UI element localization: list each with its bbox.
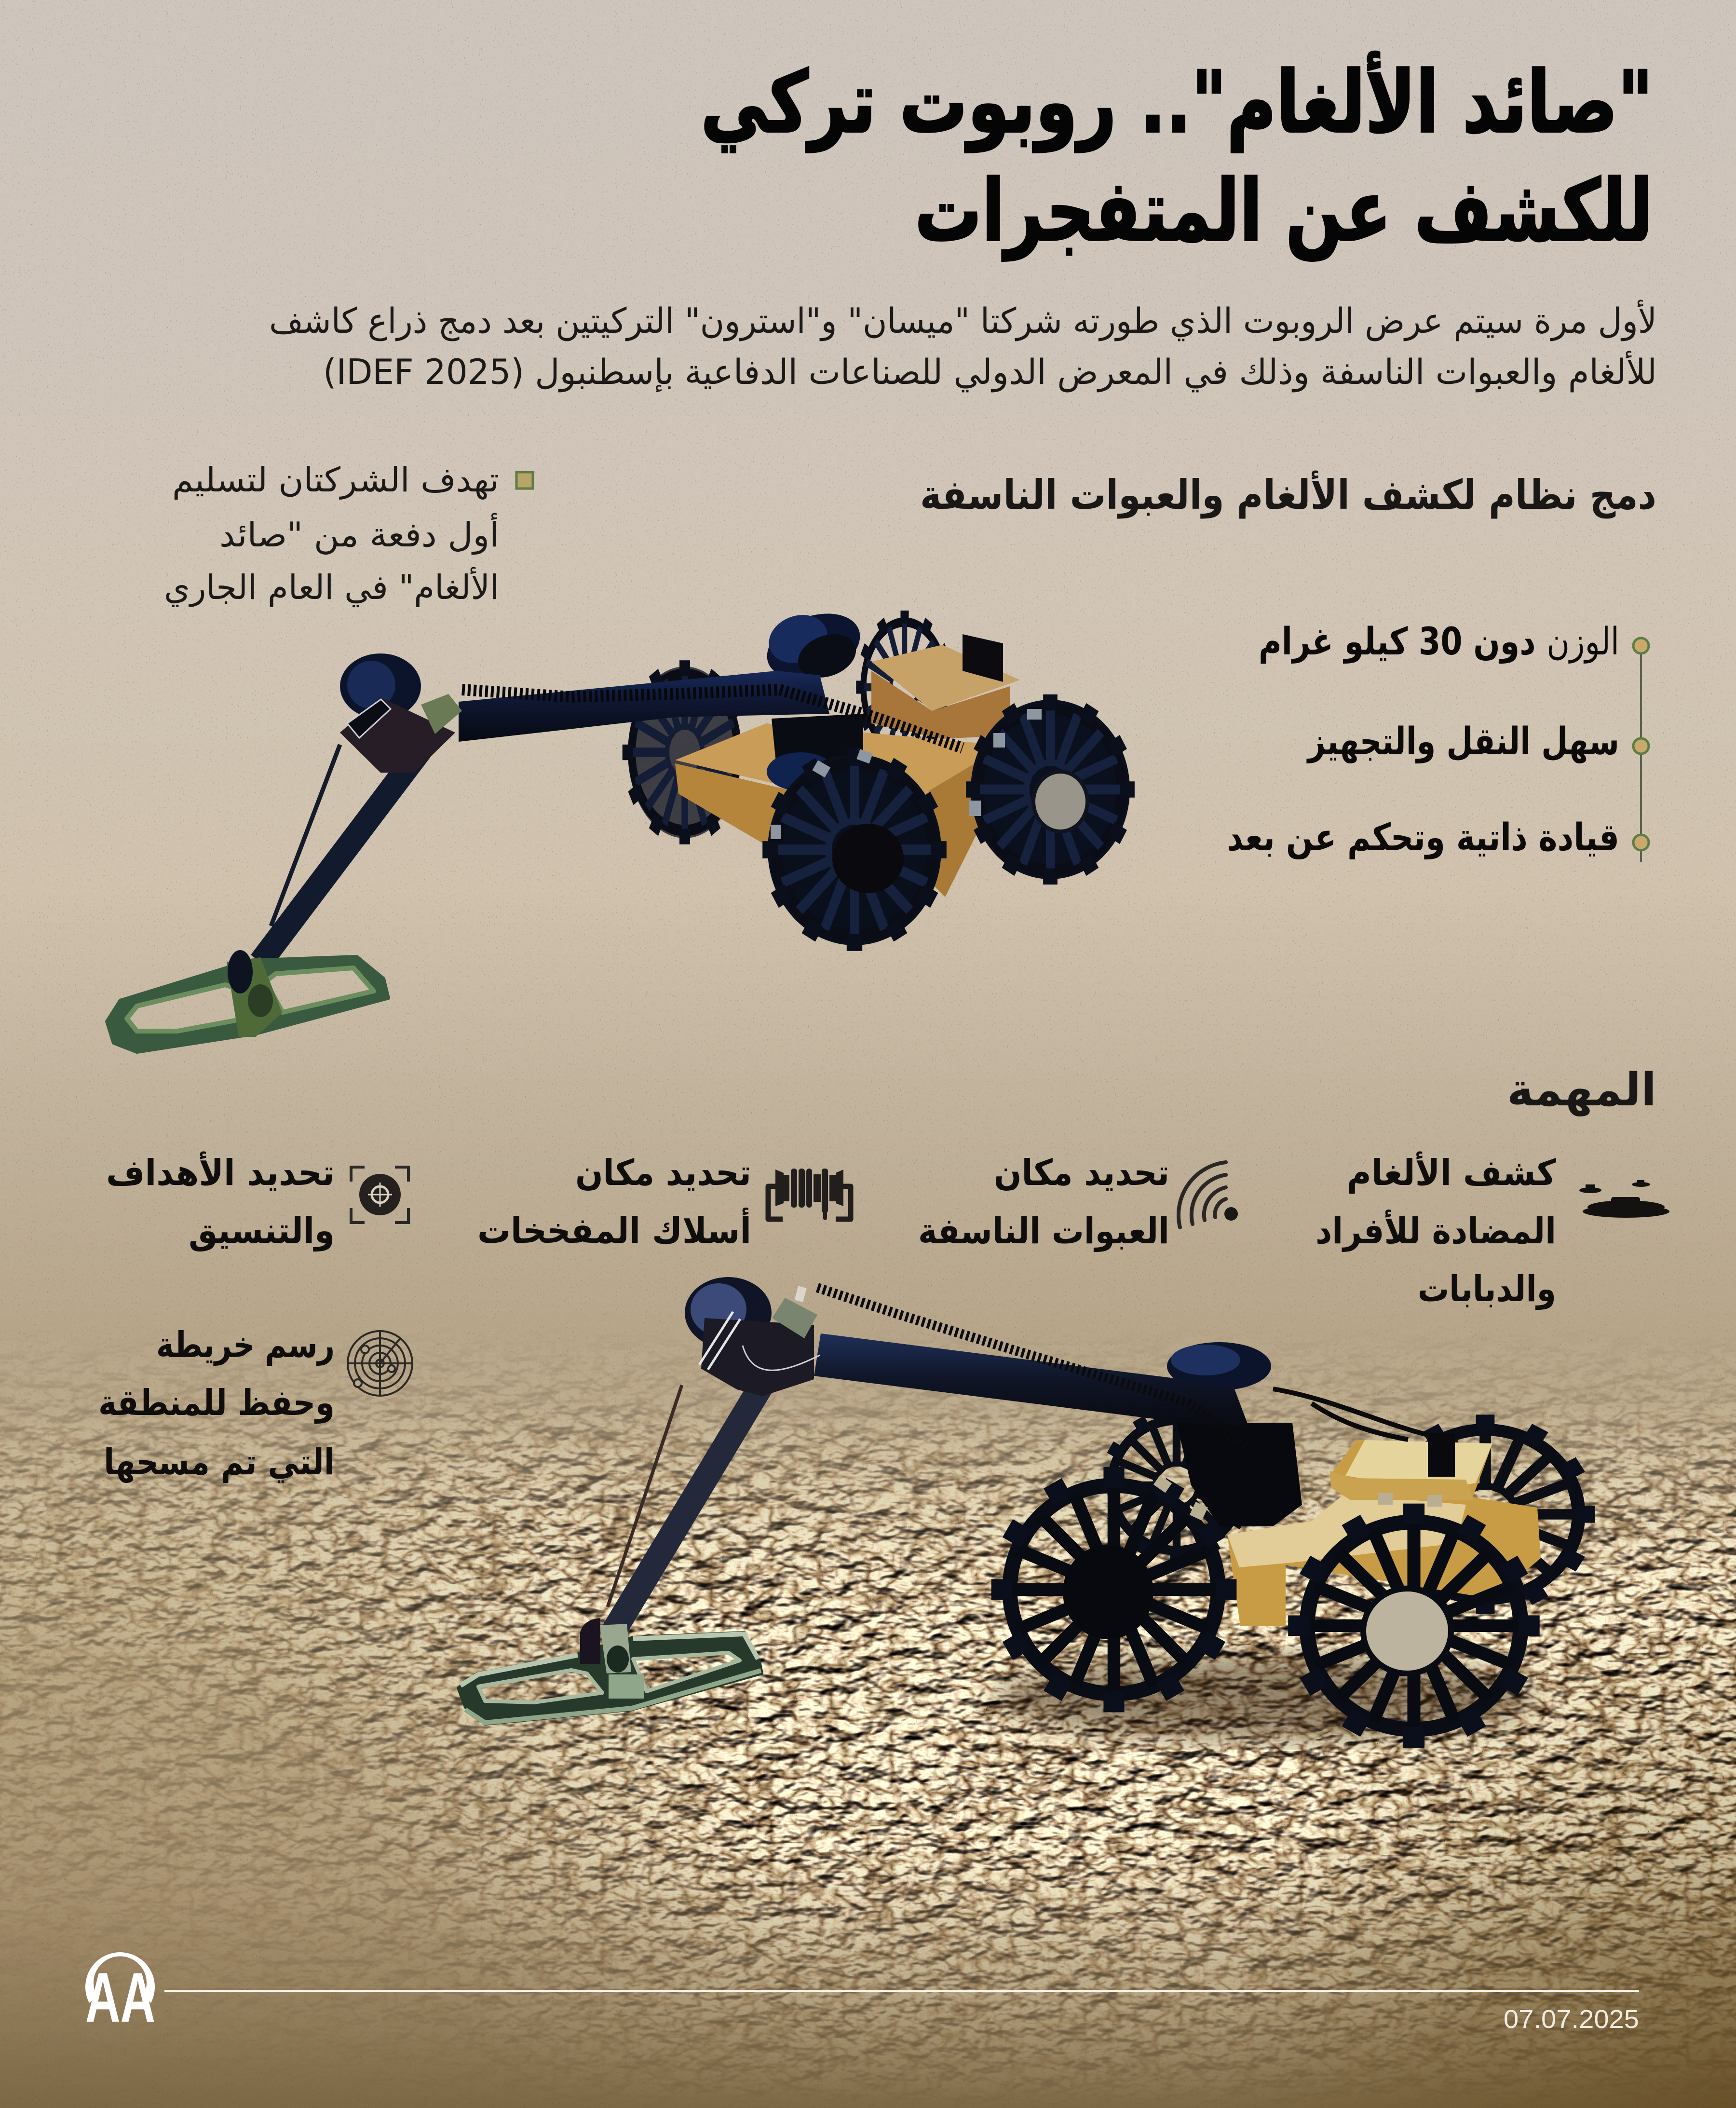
spring cable [817, 1288, 1247, 1447]
elbow motor [685, 1277, 772, 1348]
mission item: identify targets [106, 1151, 408, 1252]
mission item: mapping: وحفظ للمنطقة [98, 1382, 335, 1424]
mission item: locate explosives: تحديد مكان [994, 1152, 1169, 1194]
mission item: locate explosives: العبوات الناسفة [918, 1210, 1169, 1252]
robot photo: on gravel [458, 1277, 1595, 1748]
intro paragraph: لأول مرة سيتم عرض الروبوت الذي طورته شركتا "ميسان" و"استرون" التركيتين بعد دمج ذراع كاشف [269, 299, 1657, 341]
thin support cable [608, 1385, 682, 1607]
mission item: detect mines: والدبابات [1418, 1268, 1556, 1310]
green sensor box [421, 694, 462, 734]
intro paragraph [269, 299, 1657, 393]
robot photo: upper view [107, 602, 1135, 1052]
side note with square bullet: الألغام" في العام الجاري [164, 567, 499, 608]
section heading: detection system: دمج نظام لكشف الألغام والعبوات الناسفة [920, 470, 1656, 519]
feature list with timeline: قيادة ذاتية وتحكم عن بعد [1227, 816, 1619, 859]
logo: AA: AA [85, 1958, 155, 2037]
icon: mines [1579, 1180, 1669, 1218]
lower arm [260, 745, 424, 962]
ground shadow [993, 1654, 1533, 1741]
mission item: identify targets: تحديد الأهداف [106, 1151, 335, 1194]
silver tags on wheels [771, 709, 1042, 839]
mission item: locate tripwires [477, 1152, 851, 1251]
equipment box [871, 671, 1010, 739]
tan chassis [1227, 1440, 1541, 1626]
mission item: detect mines: المضادة للأفراد [1316, 1210, 1556, 1252]
black mount [1428, 1433, 1455, 1477]
shoulder motor [1167, 1342, 1271, 1390]
front wheel [762, 748, 947, 951]
icon: signal [1179, 1162, 1238, 1227]
turret [772, 714, 863, 784]
section heading: mission: المهمة [1507, 1064, 1656, 1116]
lower arm [612, 1377, 767, 1634]
mission item: identify targets: والتنسيق [189, 1210, 335, 1252]
right wheel [966, 694, 1135, 884]
side note with square bullet: تهدف الشركتان لتسليم [172, 460, 499, 500]
feature list with timeline [1227, 620, 1649, 862]
detector head [107, 950, 389, 1052]
mission item: detect mines: كشف الألغام [1347, 1151, 1557, 1194]
turret [1177, 1423, 1302, 1526]
green sensor box [772, 1298, 817, 1338]
title [701, 51, 1653, 261]
mission item: mapping [98, 1324, 412, 1483]
icon: wire coil [768, 1169, 851, 1220]
upper arm [814, 1333, 1249, 1428]
mission item: mapping: رسم خريطة [156, 1324, 335, 1366]
front left wheel [991, 1467, 1236, 1712]
side note with square bullet: أول دفعة من "صائد [219, 513, 499, 555]
icon: radar [348, 1331, 412, 1396]
rear left wheel [623, 660, 747, 844]
spring cable [462, 690, 963, 748]
logo: AA [85, 1952, 155, 2037]
cable bundle [1273, 1389, 1427, 1440]
side note with square bullet [164, 460, 533, 608]
footer rule [164, 1990, 1639, 1992]
detector head [458, 1618, 762, 1724]
elbow block [701, 1318, 814, 1396]
back top wheel [856, 611, 953, 764]
mission item: locate tripwires: أسلاك المفخخات [477, 1207, 751, 1251]
mission item: locate tripwires: تحديد مكان [575, 1152, 751, 1194]
elbow block [340, 697, 455, 773]
thin support cable [271, 745, 340, 926]
tan chassis [675, 723, 996, 834]
icon: target [351, 1167, 408, 1223]
elbow motor [340, 653, 421, 719]
feature list with timeline: سهل النقل والتجهيز [1306, 720, 1619, 763]
intro paragraph: للألغام والعبوات الناسفة وذلك في المعرض الدولي للصناعات الدفاعية بإسطنبول (IDEF 2025) [323, 351, 1657, 393]
mission item: detect mines [1316, 1151, 1669, 1310]
rear wheels [1100, 1409, 1253, 1562]
front right wheel [1288, 1504, 1540, 1748]
icon: square bullet [516, 472, 533, 489]
mission item: locate explosives [918, 1152, 1238, 1252]
silver tags on wheels [1153, 1475, 1442, 1521]
mission item: mapping: التي تم مسحها [104, 1442, 335, 1483]
feature list with timeline: الوزن دون 30 كيلو غرام [1259, 620, 1619, 664]
date: 07.07.2025 [1504, 2005, 1639, 2034]
shoulder motor [758, 602, 869, 691]
upper arm [459, 671, 829, 742]
